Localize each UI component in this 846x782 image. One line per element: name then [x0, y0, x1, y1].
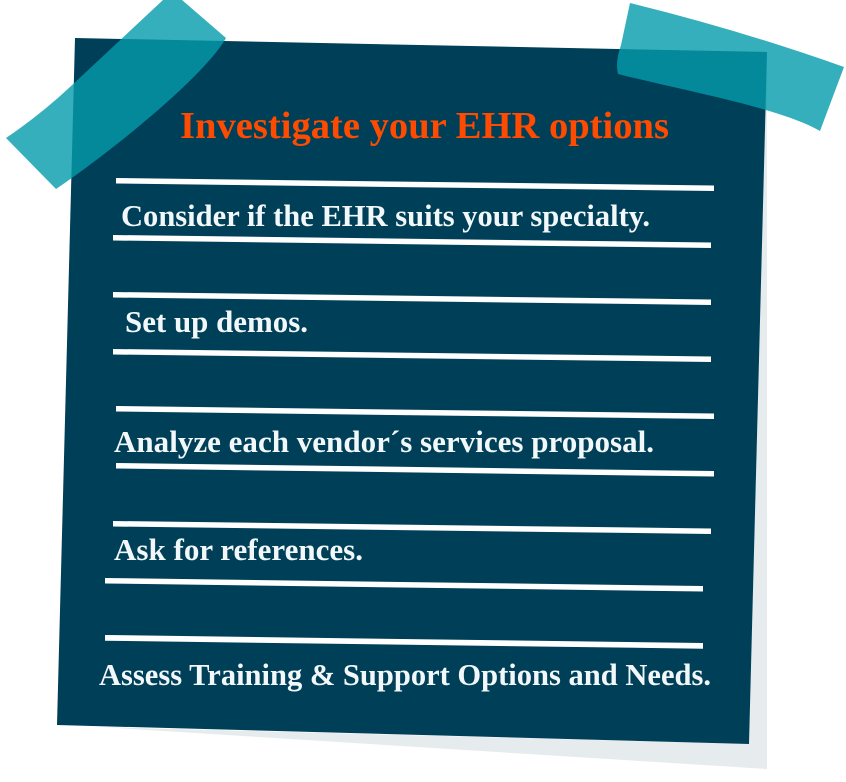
tape: top right	[617, 3, 844, 131]
tape: top left	[6, 0, 226, 189]
note shadow	[100, 52, 767, 769]
list item 2	[113, 292, 711, 362]
note panel	[57, 38, 767, 744]
list item 1: Consider if the EHR suits your specialty.	[121, 199, 650, 233]
list item 2: Set up demos.	[125, 305, 308, 339]
list item 3	[114, 406, 714, 476]
list item 4	[105, 521, 711, 592]
list item 5: Assess Training & Support Options and Needs.	[99, 658, 711, 692]
list item 5	[99, 635, 711, 692]
list item 1	[113, 178, 714, 248]
list item 4: Ask for references.	[114, 533, 363, 567]
list item 3: Analyze each vendor´s services proposal.	[114, 425, 654, 459]
title: Investigate your EHR options	[180, 105, 669, 147]
